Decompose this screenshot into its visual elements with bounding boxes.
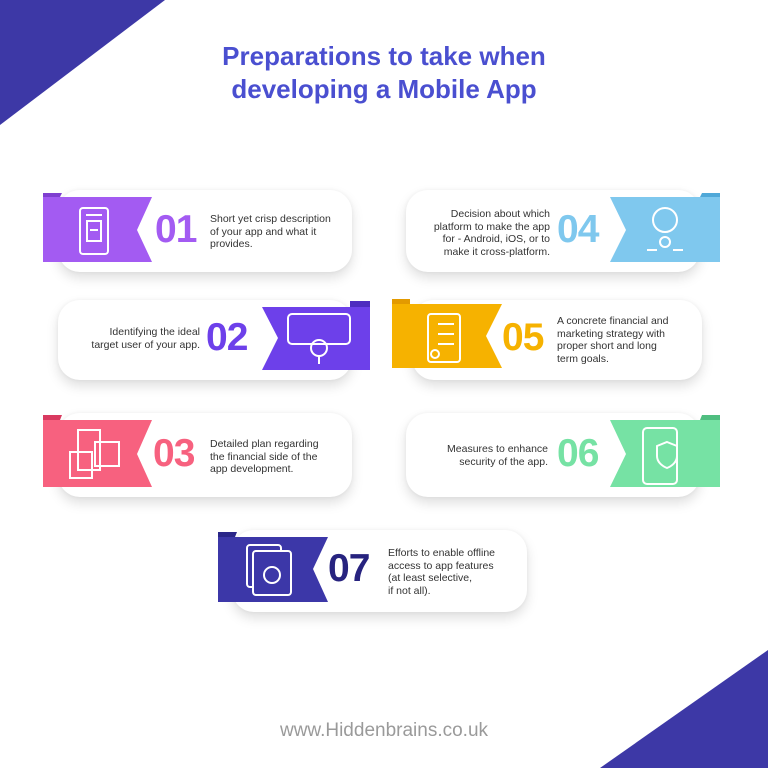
text 04: Decision about which bbox=[451, 208, 550, 220]
number 01: 01 bbox=[155, 208, 196, 251]
ribbon 07 bbox=[218, 532, 328, 602]
text 05: A concrete financial and bbox=[557, 315, 668, 327]
text 05: proper short and long bbox=[557, 340, 657, 352]
text 07: if not all). bbox=[388, 584, 431, 596]
title: developing a Mobile App bbox=[231, 74, 537, 104]
footer url: www.Hiddenbrains.co.uk bbox=[280, 720, 488, 741]
panel: step 07 bbox=[218, 530, 530, 622]
text 07: (at least selective, bbox=[388, 572, 472, 584]
number 03: 03 bbox=[153, 432, 194, 475]
text 06: security of the app. bbox=[459, 456, 548, 468]
corner triangle bottom-right bbox=[600, 650, 768, 768]
text 05: marketing strategy with bbox=[557, 328, 665, 340]
text 01: Short yet crisp description bbox=[210, 213, 331, 225]
text 04: platform to make the app bbox=[434, 220, 550, 232]
text 07: Efforts to enable offline bbox=[388, 547, 495, 559]
text 02: Identifying the ideal bbox=[110, 326, 200, 338]
text 06: Measures to enhance bbox=[447, 443, 548, 455]
text 06 bbox=[447, 443, 548, 468]
panel: step 02 bbox=[54, 300, 370, 390]
text 04: make it cross-platform. bbox=[444, 246, 550, 258]
text 04: for - Android, iOS, or to bbox=[443, 233, 550, 245]
number 05: 05 bbox=[502, 316, 543, 359]
title bbox=[222, 41, 546, 104]
text 03: app development. bbox=[210, 463, 293, 475]
title: Preparations to take when bbox=[222, 41, 546, 71]
number 06: 06 bbox=[557, 432, 598, 475]
number 04: 04 bbox=[557, 208, 598, 251]
panel: step 01 bbox=[43, 190, 356, 282]
corner triangle top-left bbox=[0, 0, 165, 125]
text 01: provides. bbox=[210, 238, 253, 250]
text 03: the financial side of the bbox=[210, 450, 317, 462]
ribbon 04 bbox=[610, 193, 720, 262]
ribbon 01 bbox=[43, 193, 152, 262]
text 02: target user of your app. bbox=[91, 338, 200, 350]
panel: step 06 bbox=[402, 412, 720, 506]
ribbon 05 bbox=[392, 299, 502, 368]
text 03: Detailed plan regarding bbox=[210, 438, 319, 450]
number 02: 02 bbox=[206, 316, 247, 359]
panel: step 05 bbox=[392, 299, 706, 390]
ribbon 03 bbox=[43, 415, 152, 487]
ribbon 06 bbox=[610, 415, 720, 487]
text 07 bbox=[388, 547, 495, 596]
text 01 bbox=[210, 213, 331, 250]
number 07: 07 bbox=[328, 547, 369, 590]
panel: step 04 bbox=[402, 190, 720, 282]
text 02 bbox=[91, 326, 200, 350]
panel: step 03 bbox=[43, 412, 356, 506]
text 03 bbox=[210, 438, 319, 475]
text 01: of your app and what it bbox=[210, 226, 316, 238]
text 04 bbox=[434, 208, 550, 258]
text 05: term goals. bbox=[557, 352, 609, 364]
text 05 bbox=[557, 315, 668, 364]
ribbon 02 bbox=[262, 301, 370, 370]
text 07: access to app features bbox=[388, 560, 494, 572]
